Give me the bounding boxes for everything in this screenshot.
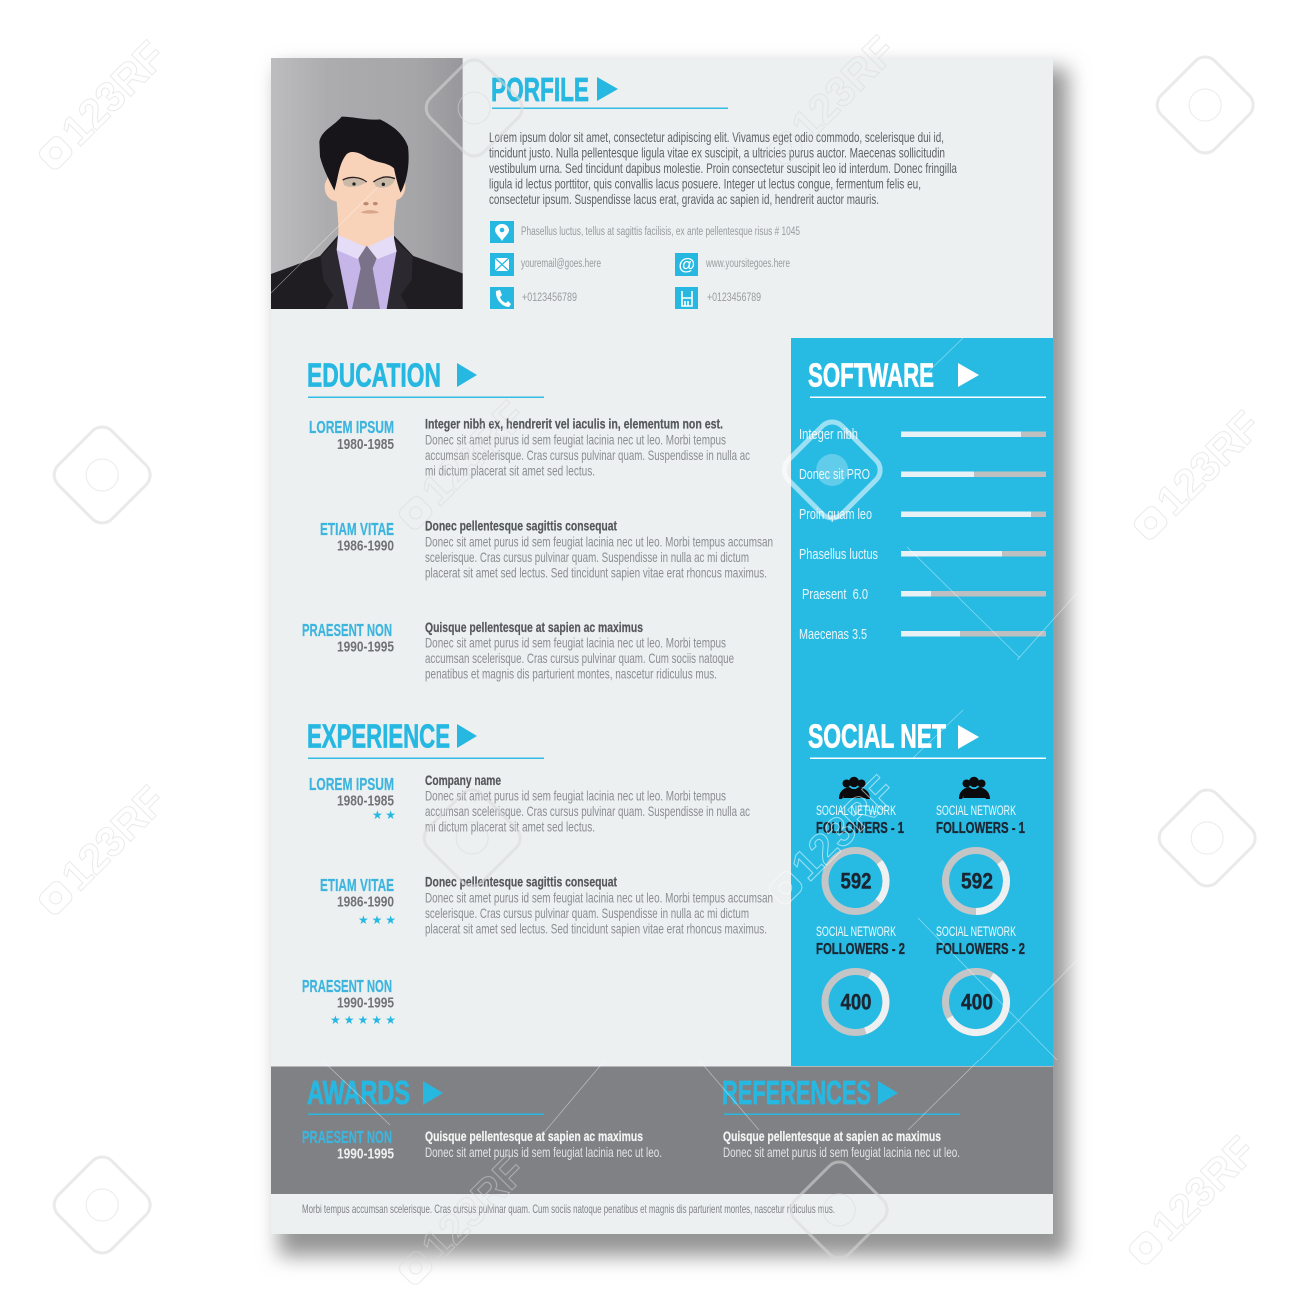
- heading: software: SOFTWARE: [808, 358, 934, 394]
- social stat 4: SOCIAL NETWORK: [936, 924, 1016, 939]
- social stat 4: [936, 924, 1025, 1033]
- experience entry 2: Donec sit amet purus id sem feugiat lacinia nec ut leo. Morbi tempus accumsan: [425, 890, 773, 906]
- education entry 3: accumsan scelerisque. Cras cursus pulvinar quam. Cum sociis natoque: [425, 650, 734, 666]
- experience entry 2: scelerisque. Cras cursus pulvinar quam. Suspendisse in nulla ac mi dictum: [425, 905, 749, 921]
- education entry 1: Integer nibh ex, hendrerit vel iaculis in, elementum non est.: [425, 416, 723, 432]
- education entry 1: 1980-1985: [337, 436, 394, 453]
- software bar chart: Proin quam leo: [799, 506, 872, 523]
- icon: people left: [839, 777, 870, 799]
- education entry 3: penatibus et magnis dis parturient montes, nascetur ridiculus mus.: [425, 666, 717, 682]
- watermarks: 123RF: [1142, 1127, 1265, 1249]
- contact: phone: [490, 287, 577, 309]
- experience entry 2: ★★★: [358, 913, 396, 927]
- social stat 3: FOLLOWERS - 2: [816, 941, 905, 958]
- watermarks: 123RF: [1147, 402, 1270, 524]
- experience entry 1: Company name: [425, 772, 501, 788]
- profile text block: [489, 129, 957, 207]
- section: awards: Quisque pellentesque at sapien ac maximus: [425, 1128, 643, 1144]
- contact: email: youremail@goes.here: [521, 258, 601, 270]
- education entry 1: [309, 416, 750, 478]
- social stat 1: [816, 803, 904, 912]
- heading: social net: SOCIAL NET: [808, 718, 946, 756]
- software bar chart: Phasellus luctus: [799, 546, 878, 563]
- experience entry 1: Donec sit amet purus id sem feugiat lacinia nec ut leo. Morbi tempus: [425, 788, 726, 804]
- experience entry 1: [309, 772, 750, 834]
- experience entry 2: ETIAM VITAE: [320, 875, 394, 895]
- watermarks: 123RF: [782, 767, 905, 889]
- experience entry 3: ★★★★★: [330, 1013, 396, 1027]
- experience entry 3: [302, 976, 396, 1027]
- profile text block: consectetur ipsum. Suspendisse lacus erat, gravida ac sapien id, hendrerit auctor mauris.: [489, 191, 879, 207]
- profile text block: vestibulum urna. Sed tincidunt dapibus molestie. Proin consectetur suscipit leo id interdum. Donec fringilla: [489, 160, 957, 176]
- experience entry 2: 1986-1990: [337, 894, 394, 910]
- education entry 2: placerat sit amet sed lectus. Sed tincidunt sapien vitae erat rhoncus maximus.: [425, 564, 767, 580]
- education entry 3: PRAESENT NON: [302, 620, 392, 640]
- contact: website: www.yoursitegoes.here: [705, 258, 790, 270]
- experience entry 1: LOREM IPSUM: [309, 774, 394, 794]
- social stat 3: SOCIAL NETWORK: [816, 924, 896, 939]
- section: awards: Donec sit amet purus id sem feugiat lacinia nec ut leo.: [425, 1144, 662, 1160]
- education entry 1: mi dictum placerat sit amet sed lectus.: [425, 462, 595, 478]
- software bar chart: Integer nibh: [799, 426, 858, 443]
- watermarks: 123RF: [782, 27, 905, 149]
- education entry 1: accumsan scelerisque. Cras cursus pulvinar quam. Suspendisse in nulla ac: [425, 447, 750, 463]
- experience entry 3: 1990-1995: [337, 994, 394, 1012]
- panel: grey footer band: [271, 1066, 1053, 1194]
- contact: phone: +0123456789: [522, 292, 577, 304]
- resume sheet: [271, 58, 1053, 1234]
- heading: experience: EXPERIENCE: [307, 718, 450, 756]
- education entry 3: Donec sit amet purus id sem feugiat lacinia nec ut leo. Morbi tempus: [425, 634, 726, 650]
- contact: fax: +0123456789: [707, 292, 761, 304]
- social stat 2: SOCIAL NETWORK: [936, 803, 1016, 818]
- section: references: Donec sit amet purus id sem feugiat lacinia nec ut leo.: [723, 1144, 960, 1160]
- watermarks: 123RF: [412, 392, 535, 514]
- panel: blue sidebar: [791, 338, 1053, 1066]
- contact: address: [490, 221, 800, 243]
- education entry 2: Donec sit amet purus id sem feugiat lacinia nec ut leo. Morbi tempus accumsan: [425, 534, 773, 550]
- experience entry 3: PRAESENT NON: [302, 976, 392, 996]
- education entry 2: Donec pellentesque sagittis consequat: [425, 518, 617, 534]
- experience entry 2: placerat sit amet sed lectus. Sed tincidunt sapien vitae erat rhoncus maximus.: [425, 920, 767, 936]
- contact: website: [675, 253, 790, 276]
- social stat 1: FOLLOWERS - 1: [816, 820, 904, 837]
- education entry 3: 1990-1995: [337, 638, 394, 656]
- education entry 2: ETIAM VITAE: [320, 519, 394, 539]
- portrait photo: [271, 58, 463, 309]
- education entry 3: [302, 619, 734, 682]
- page shadow: [279, 68, 1068, 1256]
- section: awards: [302, 1075, 662, 1162]
- social stat 1: 592: [840, 868, 872, 894]
- social stat 2: FOLLOWERS - 1: [936, 820, 1025, 837]
- social stat 3: [816, 924, 905, 1032]
- heading: profile: PORFILE: [491, 72, 589, 109]
- social stat 2: [936, 803, 1025, 912]
- software bar chart: [799, 426, 1046, 643]
- footer note: Morbi tempus accumsan scelerisque. Cras cursus pulvinar quam. Cum sociis natoque penatibus et magnis dis parturient montes, nascetur ridiculus mus.: [302, 1202, 835, 1216]
- section: references: REFERENCES: [722, 1075, 871, 1112]
- social stat 2: 592: [961, 868, 993, 894]
- education entry 1: Donec sit amet purus id sem feugiat lacinia nec ut leo. Morbi tempus: [425, 432, 726, 448]
- section: references: Quisque pellentesque at sapien ac maximus: [723, 1128, 941, 1144]
- profile text block: Lorem ipsum dolor sit amet, consectetur adipiscing elit. Vivamus eget odio commodo, scelerisque dui id,: [489, 129, 944, 145]
- education entry 3: Quisque pellentesque at sapien ac maximus: [425, 619, 643, 635]
- profile text block: tincidunt justo. Nulla pellentesque ligula vitae ex suscipit, a ultricies purus auctor. Maecenas sollicitudin: [489, 144, 945, 160]
- social stat 3: 400: [840, 990, 872, 1014]
- social stat 1: SOCIAL NETWORK: [816, 803, 896, 818]
- section: awards: PRAESENT NON: [302, 1127, 392, 1147]
- social stat 4: 400: [961, 990, 993, 1014]
- education entry 2: scelerisque. Cras cursus pulvinar quam. Suspendisse in nulla ac mi dictum: [425, 549, 749, 565]
- social stat 4: FOLLOWERS - 2: [936, 941, 1025, 958]
- experience entry 2: [320, 874, 773, 936]
- icon: people right: [959, 777, 990, 799]
- section: awards: 1990-1995: [337, 1146, 394, 1162]
- experience entry 1: mi dictum placerat sit amet sed lectus.: [425, 818, 595, 834]
- watermarks: 123RF: [52, 777, 175, 899]
- profile text block: ligula id lectus porttitor, quis convallis lacus posuere. Integer ut lectus congue, fermentum felis eu,: [489, 176, 921, 192]
- watermarks: 123RF: [52, 32, 175, 154]
- heading: education: EDUCATION: [307, 358, 441, 394]
- experience entry 1: 1980-1985: [337, 792, 394, 810]
- education entry 2: [320, 518, 773, 580]
- software bar chart: Praesent 6.0: [802, 586, 868, 603]
- contact: email: [490, 253, 601, 276]
- section: references: [722, 1075, 960, 1160]
- experience entry 2: Donec pellentesque sagittis consequat: [425, 874, 617, 890]
- heading: profile: [491, 72, 728, 109]
- education entry 1: LOREM IPSUM: [309, 417, 394, 437]
- education entry 2: 1986-1990: [337, 538, 394, 554]
- experience entry 1: ★★: [372, 808, 396, 822]
- watermarks: 123RF: [412, 1147, 535, 1269]
- contact: website: @: [678, 255, 695, 274]
- software bar chart: Donec sit PRO: [799, 466, 870, 483]
- section: awards: AWARDS: [307, 1075, 410, 1112]
- software bar chart: Maecenas 3.5: [799, 626, 867, 643]
- experience entry 1: accumsan scelerisque. Cras cursus pulvinar quam. Suspendisse in nulla ac: [425, 803, 750, 819]
- contact: address: Phasellus luctus, tellus at sagittis facilisis, ex ante pellentesque risus # 1045: [521, 226, 800, 238]
- contact: fax: [675, 287, 761, 309]
